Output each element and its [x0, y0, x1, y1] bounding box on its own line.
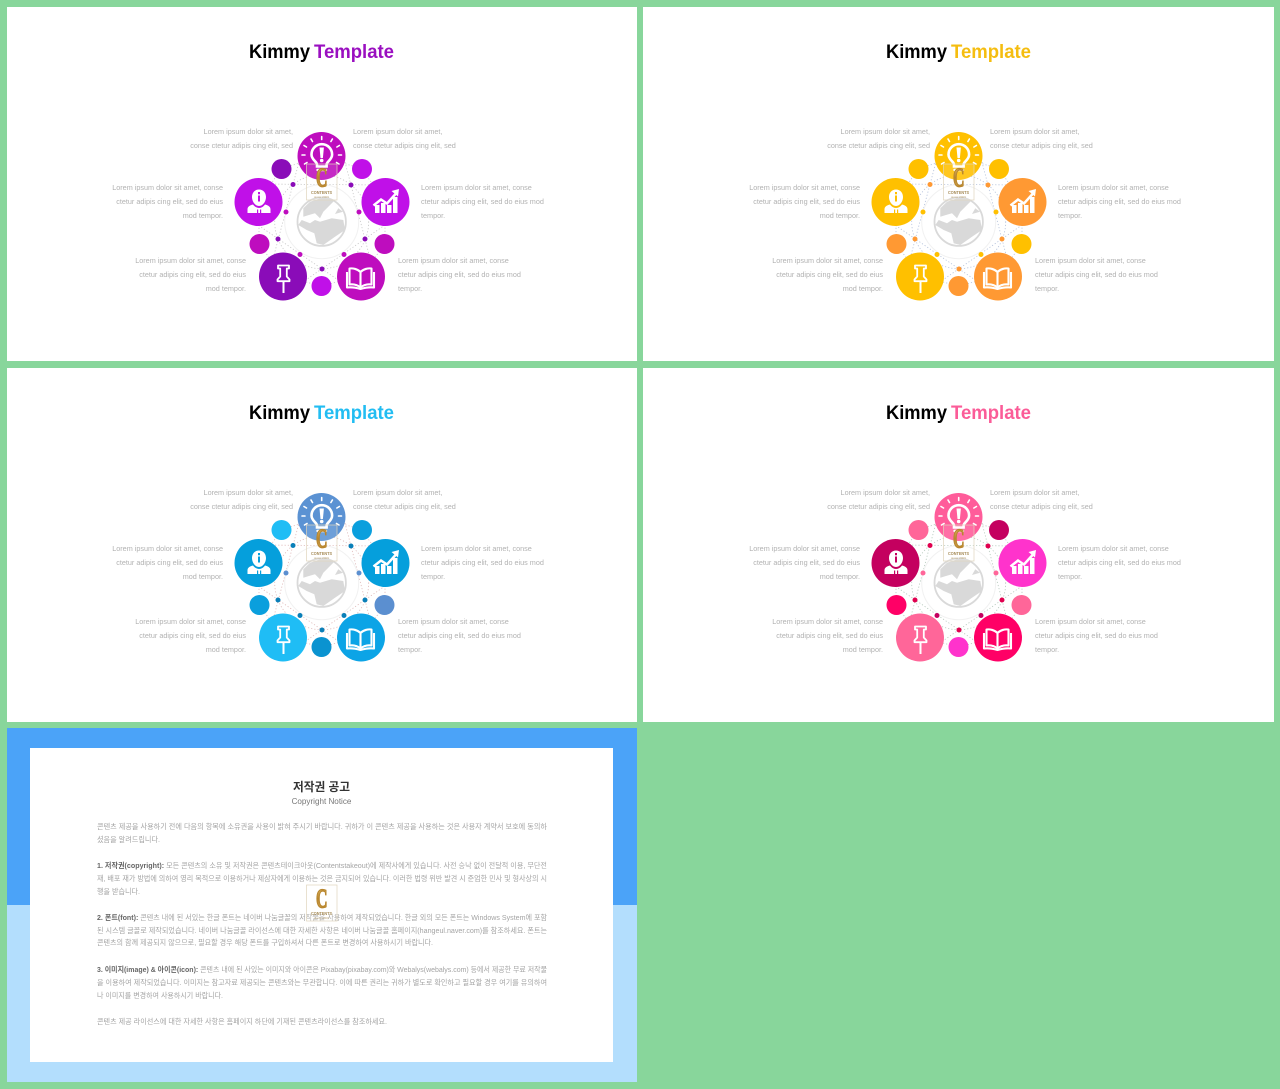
logo watermark — [306, 884, 337, 921]
text block: copyright body: 재, 배포 재가 방법에 의하여 영리 목적으로 이용하거나 제삼자에게 이용하는 것은 금지되어 있습니다. 이러한 법령 위반 발견 시 준엄한 민사 및 형사상의 시 — [97, 873, 547, 883]
text labels: blue — [112, 488, 544, 654]
text labels: blue: Lorem ipsum dolor sit amet, — [353, 488, 442, 497]
text labels: yellow: ctetur adipis cing elit, sed do eius mod — [1035, 270, 1158, 279]
text labels: pink: mod tempor. — [843, 645, 883, 654]
panel: copyright notice — [7, 728, 637, 1082]
text labels: yellow: ctetur adipis cing elit, sed do eius — [776, 270, 883, 279]
title: pink: Template — [951, 403, 1031, 424]
text labels: purple: ctetur adipis cing elit, sed do eius mod — [421, 197, 544, 206]
text labels: purple: ctetur adipis cing elit, sed do eius mod — [398, 270, 521, 279]
text block: copyright body — [97, 821, 547, 1026]
text labels: purple: ctetur adipis cing elit, sed do eius — [139, 270, 246, 279]
text labels: blue: Lorem ipsum dolor sit amet, conse — [398, 617, 509, 626]
text labels: purple: tempor. — [421, 211, 445, 220]
text block: copyright body: 셨음을 알려드립니다. — [97, 834, 160, 844]
title: yellow — [886, 42, 1031, 63]
text labels: blue: Lorem ipsum dolor sit amet, — [204, 488, 293, 497]
diagram: blue ring — [234, 493, 410, 662]
text labels: purple: conse ctetur adipis cing elit, sed — [353, 141, 456, 150]
title: pink: Kimmy — [886, 403, 947, 424]
text labels: yellow: Lorem ipsum dolor sit amet, — [841, 127, 930, 136]
text labels: blue: Lorem ipsum dolor sit amet, conse — [135, 617, 246, 626]
text labels: blue: tempor. — [421, 572, 445, 581]
text labels: pink: Lorem ipsum dolor sit amet, conse — [1035, 617, 1146, 626]
text labels: blue: ctetur adipis cing elit, sed do eius mod — [421, 558, 544, 567]
text block: copyright body: 나 이미지를 변경하여 사용하시기 바랍니다. — [97, 990, 223, 1000]
text block: copyright body: 콘텐츠의 함께 제공되지 않으므로, 필요할 경우 해당 폰트를 구입하셔서 다른 폰트로 변경하여 사용하시기 바랍니다. — [97, 937, 433, 947]
text labels: yellow — [749, 127, 1181, 293]
title: pink — [886, 403, 1031, 424]
text labels: pink: ctetur adipis cing elit, sed do eius mod — [1035, 631, 1158, 640]
text labels: pink: tempor. — [1035, 645, 1059, 654]
text labels: pink: conse ctetur adipis cing elit, sed — [827, 502, 930, 511]
text block: copyright body: 3. 이미지(image) & 아이콘(icon): 콘텐츠 내에 된 사있는 이미지와 아이콘은 Pixabay(pixabay.com)와 Webalys(webalys.com) 등에서 제공한 무료 저작물 — [97, 964, 547, 974]
text labels: purple: Lorem ipsum dolor sit amet, — [204, 127, 293, 136]
text labels: purple: Lorem ipsum dolor sit amet, — [353, 127, 442, 136]
text labels: yellow: ctetur adipis cing elit, sed do eius — [753, 197, 860, 206]
text labels: yellow: ctetur adipis cing elit, sed do eius mod — [1058, 197, 1181, 206]
text labels: blue: mod tempor. — [183, 572, 223, 581]
text labels: yellow: mod tempor. — [820, 211, 860, 220]
text labels: blue: conse ctetur adipis cing elit, sed — [190, 502, 293, 511]
heading: copyright: Copyright Notice — [292, 797, 352, 806]
text labels: purple: conse ctetur adipis cing elit, sed — [190, 141, 293, 150]
text labels: yellow: tempor. — [1058, 211, 1082, 220]
text labels: yellow: Lorem ipsum dolor sit amet, conse — [1035, 256, 1146, 265]
text labels: pink: Lorem ipsum dolor sit amet, — [841, 488, 930, 497]
text block: copyright body: 을 이용하여 제작되었습니다. 이미지는 참고자료 제공되는 콘텐츠와는 무관합니다. 이에 따른 권리는 귀하가 별도로 확인하고 필요할 경우 여기를 유의하여 — [97, 977, 547, 987]
text labels: blue: mod tempor. — [206, 645, 246, 654]
text block: copyright body: 콘텐츠 제공 라이선스에 대한 자세한 사항은 홈페이지 하단에 기재된 콘텐츠라이선스를 참조하세요. — [97, 1016, 387, 1026]
title: yellow: Template — [951, 42, 1031, 63]
text labels: purple: mod tempor. — [206, 284, 246, 293]
text labels: pink — [749, 488, 1181, 654]
text labels: blue: ctetur adipis cing elit, sed do eius mod — [398, 631, 521, 640]
text labels: blue: ctetur adipis cing elit, sed do eius — [139, 631, 246, 640]
heading: copyright — [292, 780, 352, 806]
text labels: blue: Lorem ipsum dolor sit amet, conse — [421, 544, 532, 553]
diagram: yellow ring — [872, 132, 1046, 300]
panel: pink template slide — [643, 368, 1274, 722]
text block: copyright body: 된 시스템 글꼴로 제작되었습니다. 네이버 나눔글꼴 라이선스에 대한 자세한 사항은 네이버 나눔글꼴 홈페이지(hangeul.naver.com)를 참조하세요. 폰트는 — [97, 925, 547, 935]
text labels: blue: conse ctetur adipis cing elit, sed — [353, 502, 456, 511]
title: purple: Kimmy — [249, 42, 310, 63]
text labels: pink: conse ctetur adipis cing elit, sed — [990, 502, 1093, 511]
text labels: purple: Lorem ipsum dolor sit amet, conse — [135, 256, 246, 265]
diagram: purple ring — [234, 132, 410, 300]
text labels: yellow: Lorem ipsum dolor sit amet, conse — [749, 183, 860, 192]
text labels: pink: Lorem ipsum dolor sit amet, conse — [749, 544, 860, 553]
title: purple: Template — [314, 42, 394, 63]
text labels: yellow: Lorem ipsum dolor sit amet, conse — [1058, 183, 1169, 192]
text block: copyright body: 2. 폰트(font): 콘텐츠 내에 된 서있는 한글 폰트는 네이버 나눔글꼴의 저작물을 사용하여 제작되었습니다. 한글 외의 모든 폰트는 Windows System에 포함 — [97, 912, 547, 922]
text labels: pink: tempor. — [1058, 572, 1082, 581]
text labels: pink: Lorem ipsum dolor sit amet, conse — [1058, 544, 1169, 553]
text labels: purple: ctetur adipis cing elit, sed do eius — [116, 197, 223, 206]
text labels: pink: ctetur adipis cing elit, sed do eius — [753, 558, 860, 567]
text block: copyright body: 1. 저작권(copyright): 모든 콘텐츠의 소유 및 저작권은 콘텐츠테이크아웃(Contentstakeout)에 제작사에게 있습니다. 사전 승낙 없이 전달적 이용, 무단전 — [97, 860, 547, 870]
text labels: purple: Lorem ipsum dolor sit amet, conse — [398, 256, 509, 265]
text labels: pink: mod tempor. — [820, 572, 860, 581]
title: blue: Kimmy — [249, 403, 310, 424]
text labels: yellow: Lorem ipsum dolor sit amet, — [990, 127, 1079, 136]
text labels: blue: Lorem ipsum dolor sit amet, conse — [112, 544, 223, 553]
panel: yellow template slide — [643, 7, 1274, 361]
panel: purple template slide — [7, 7, 637, 361]
panel: blue template slide — [7, 368, 637, 722]
text labels: purple: Lorem ipsum dolor sit amet, conse — [421, 183, 532, 192]
text labels: purple — [112, 127, 544, 293]
text labels: yellow: conse ctetur adipis cing elit, sed — [827, 141, 930, 150]
text labels: purple: Lorem ipsum dolor sit amet, conse — [112, 183, 223, 192]
diagram: pink ring — [872, 493, 1046, 662]
text labels: blue: ctetur adipis cing elit, sed do eius — [116, 558, 223, 567]
title: purple — [249, 42, 394, 63]
text block: copyright body: 행을 받습니다. — [97, 886, 140, 896]
text labels: yellow: conse ctetur adipis cing elit, sed — [990, 141, 1093, 150]
title: yellow: Kimmy — [886, 42, 947, 63]
text block: copyright body: 콘텐츠 제공을 사용하기 전에 다음의 항목에 소유권을 사용이 밝혀 주시기 바랍니다. 귀하가 이 콘텐츠 제공을 사용하는 것은 사용자 계약서 보호에 동의하 — [97, 821, 547, 831]
text labels: purple: mod tempor. — [183, 211, 223, 220]
text labels: yellow: mod tempor. — [843, 284, 883, 293]
text labels: pink: ctetur adipis cing elit, sed do eius — [776, 631, 883, 640]
text labels: yellow: Lorem ipsum dolor sit amet, conse — [772, 256, 883, 265]
heading: copyright: 저작권 공고 — [293, 780, 350, 794]
text labels: pink: Lorem ipsum dolor sit amet, conse — [772, 617, 883, 626]
text labels: pink: Lorem ipsum dolor sit amet, — [990, 488, 1079, 497]
text labels: pink: ctetur adipis cing elit, sed do eius mod — [1058, 558, 1181, 567]
text labels: blue: tempor. — [398, 645, 422, 654]
title: blue: Template — [314, 403, 394, 424]
text labels: yellow: tempor. — [1035, 284, 1059, 293]
title: blue — [249, 403, 394, 424]
text labels: purple: tempor. — [398, 284, 422, 293]
